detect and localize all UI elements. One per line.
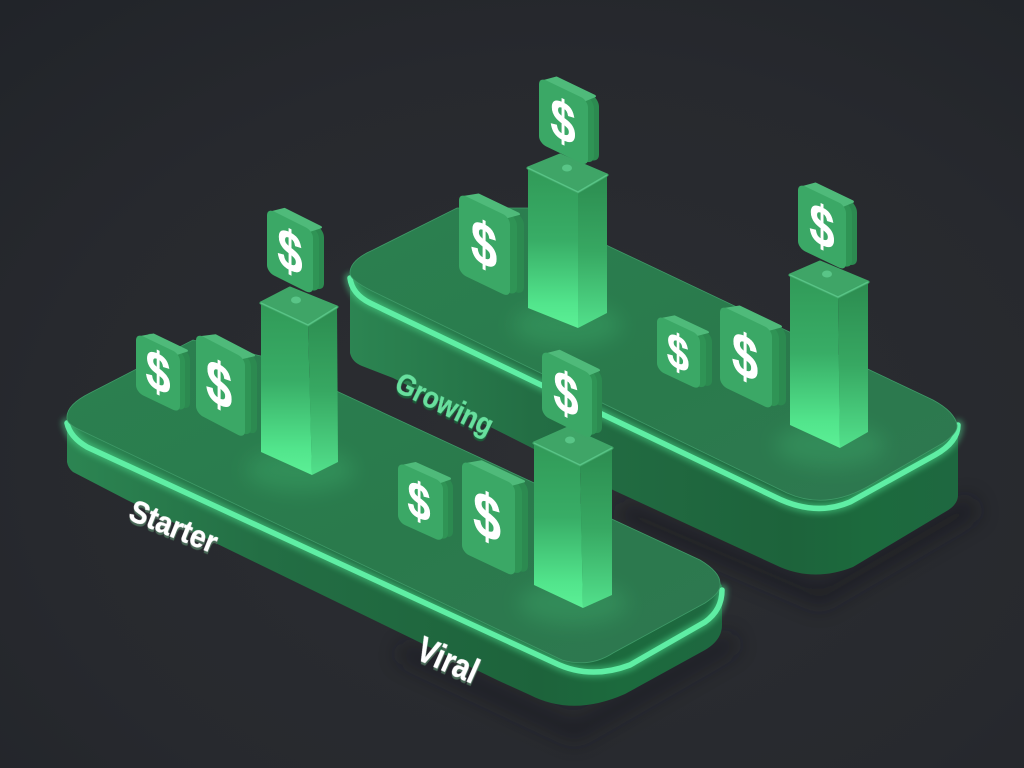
card: viral small: $ (408, 469, 430, 535)
label: Growing: Growing (390, 366, 499, 442)
card: starter medium (196, 325, 257, 445)
bar: growing tall (528, 155, 607, 328)
platform edge glow: growing (350, 278, 958, 508)
platform top: front (67, 340, 720, 663)
card: starter small: $ (146, 335, 170, 408)
card: growing top: $ (551, 85, 575, 159)
panel: growing platform (350, 69, 975, 596)
panel: starter and viral platform (67, 200, 735, 732)
bar glow: viral (518, 581, 628, 625)
bar glow: starter (245, 448, 355, 492)
platform top: growing (350, 208, 957, 500)
floor shadow: front platform (400, 640, 735, 732)
card: growing top (539, 69, 599, 172)
card: starter medium: $ (206, 344, 232, 424)
bar glow: growing right (775, 423, 885, 467)
card: growing right small: $ (667, 321, 689, 384)
card: viral small (398, 455, 453, 547)
platform side: growing (350, 240, 958, 574)
card: growing right medium (720, 297, 786, 417)
bar: growing right (790, 262, 868, 448)
card: growing right small (657, 308, 712, 396)
bar: viral (534, 428, 612, 608)
card: viral top (542, 342, 602, 444)
card: starter top: $ (278, 215, 302, 289)
label: Starter: Starter (124, 494, 223, 560)
card: growing small left: $ (471, 204, 497, 284)
platform side: front (67, 400, 722, 706)
card: growing right top: $ (810, 190, 834, 264)
bar: starter (261, 288, 338, 475)
card: growing right top (798, 175, 857, 276)
bar glow: growing (512, 303, 622, 347)
card: starter top (267, 200, 324, 300)
card: viral top: $ (554, 357, 578, 432)
platform edge glow: front (67, 423, 722, 672)
card: viral medium (462, 452, 528, 583)
card: viral medium: $ (473, 476, 501, 558)
card: growing right medium: $ (732, 316, 758, 396)
card: starter small (136, 326, 190, 418)
floor shadow: growing platform (620, 505, 975, 596)
label: Viral: Viral (411, 628, 486, 691)
card: growing small left (459, 185, 524, 304)
